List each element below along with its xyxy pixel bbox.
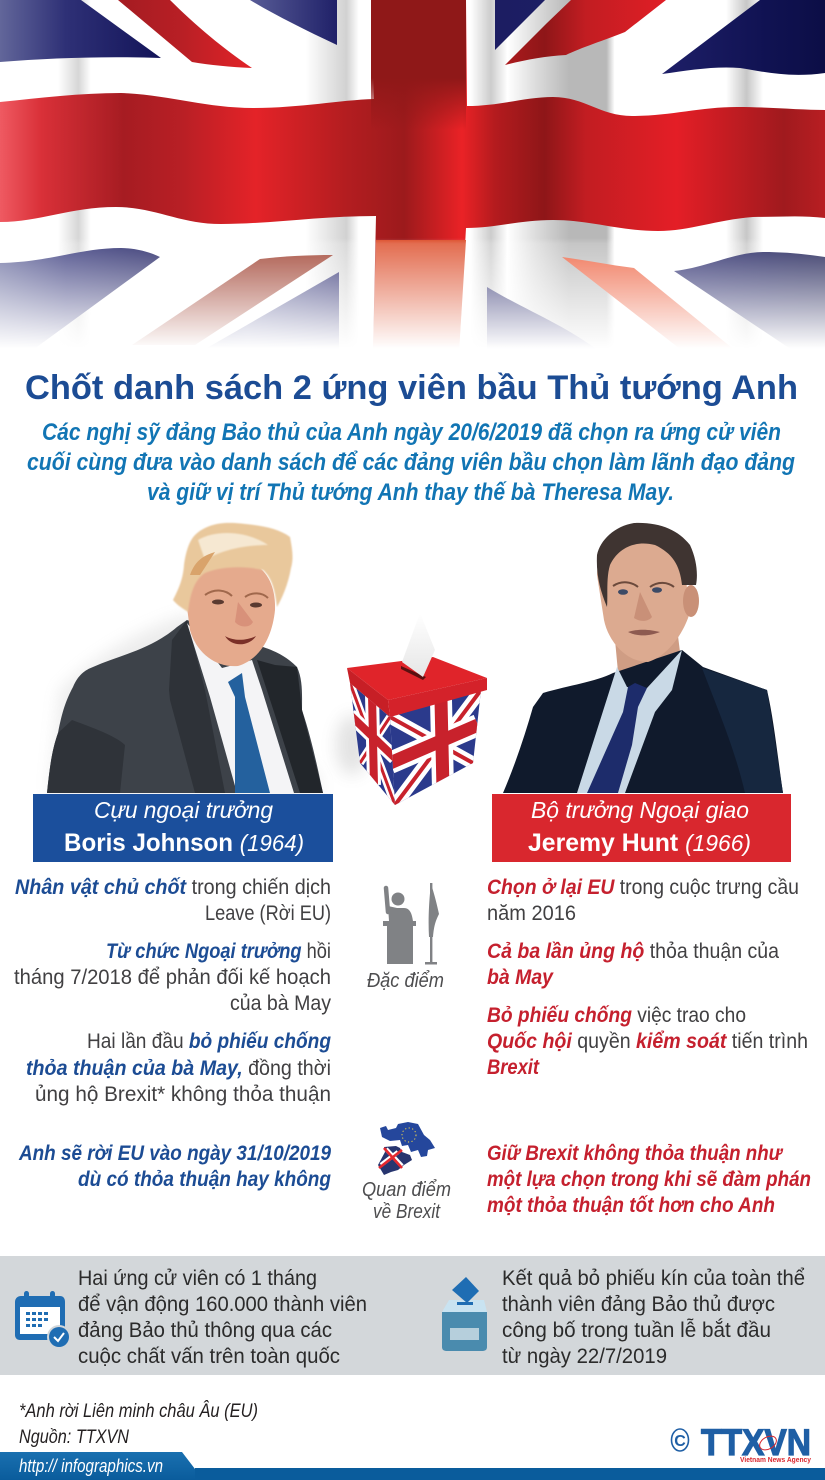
caption: Đặc điểm: Đặc điểm	[367, 970, 444, 992]
footnote and source	[19, 1400, 258, 1448]
Johnson Brexit view: dù có thỏa thuận hay không	[78, 1168, 331, 1191]
text: results: Kết quả bỏ phiếu kín của toàn thể	[502, 1267, 805, 1290]
Johnson Brexit view	[18, 1142, 331, 1191]
Hunt characteristics: Chọn ở lại EU trong cuộc trưng cầu	[487, 876, 799, 899]
Hunt characteristics	[487, 876, 808, 1079]
ballot box	[332, 634, 487, 805]
text: campaign month	[78, 1267, 367, 1368]
portrait: Jeremy Hunt	[503, 523, 783, 793]
Hunt characteristics: bà May	[487, 966, 554, 989]
text: results: thành viên đảng Bảo thủ được	[502, 1293, 775, 1316]
footer bar with URL tab: http:// infographics.vn	[19, 1456, 163, 1476]
text: campaign month: để vận động 160.000 thành viên	[78, 1293, 367, 1316]
Johnson characteristics: thỏa thuận của bà May, đồng thời	[26, 1057, 331, 1080]
text: campaign month: cuộc chất vấn trên toàn quốc	[78, 1345, 340, 1368]
Johnson characteristics: Từ chức Ngoại trưởng hồi	[106, 940, 331, 963]
Hunt characteristics: Bỏ phiếu chống việc trao cho	[487, 1004, 746, 1027]
icon: speaker at lectern with flag	[383, 883, 439, 964]
Johnson characteristics: Leave (Rời EU)	[205, 902, 331, 925]
label: Boris Johnson: Boris Johnson (1964)	[64, 829, 304, 857]
intro text	[27, 419, 795, 506]
Hunt Brexit view	[487, 1142, 811, 1217]
label: Jeremy Hunt	[492, 794, 791, 862]
text: results: từ ngày 22/7/2019	[502, 1345, 667, 1368]
text: campaign month: đảng Bảo thủ thông qua các	[78, 1319, 332, 1342]
icon: EU and UK puzzle pieces	[378, 1122, 435, 1175]
Johnson characteristics: Hai lần đầu bỏ phiếu chống	[87, 1030, 331, 1053]
Johnson characteristics: của bà May	[230, 992, 331, 1015]
label: Boris Johnson	[33, 794, 333, 862]
footer bar with URL tab	[0, 1452, 825, 1480]
Johnson Brexit view: Anh sẽ rời EU vào ngày 31/10/2019	[18, 1142, 331, 1165]
Hunt characteristics: Cả ba lần ủng hộ thỏa thuận của	[487, 940, 779, 963]
label: Boris Johnson: Cựu ngoại trưởng	[94, 797, 273, 823]
logo: TTXVN: TTXVN	[701, 1422, 811, 1463]
Hunt characteristics: năm 2016	[487, 902, 576, 925]
Hunt Brexit view: Giữ Brexit không thỏa thuận như	[487, 1142, 784, 1165]
text: campaign month: Hai ứng cử viên có 1 tháng	[78, 1267, 317, 1290]
icon: ballot box	[442, 1277, 487, 1351]
banner: waving Union Jack flag	[0, 0, 825, 352]
label: Jeremy Hunt: Jeremy Hunt (1966)	[528, 829, 751, 857]
logo: TTXVN: Vietnam News Agency	[740, 1455, 812, 1464]
footnote and source: *Anh rời Liên minh châu Âu (EU)	[19, 1400, 258, 1422]
label: Jeremy Hunt: Bộ trưởng Ngoại giao	[531, 797, 749, 823]
Johnson characteristics: ủng hộ Brexit* không thỏa thuận	[35, 1083, 331, 1106]
Hunt characteristics: Quốc hội quyền kiểm soát tiến trình	[487, 1030, 808, 1053]
portrait: Boris Johnson	[47, 523, 323, 793]
Hunt Brexit view: một thỏa thuận tốt hơn cho Anh	[487, 1194, 775, 1217]
Johnson characteristics: Nhân vật chủ chốt trong chiến dịch	[15, 876, 331, 899]
footnote and source: Nguồn: TTXVN	[19, 1427, 129, 1448]
title: Chốt danh sách 2 ứng viên bầu Thủ tướng Anh	[25, 369, 798, 407]
Hunt characteristics: Brexit	[487, 1056, 540, 1079]
caption: Quan điểm về Brexit: Quan điểm	[362, 1179, 451, 1201]
intro text: và giữ vị trí Thủ tướng Anh thay thế bà Theresa May.	[147, 479, 674, 506]
text: results: công bố trong tuần lễ bắt đầu	[502, 1319, 771, 1342]
grey info band	[0, 1256, 825, 1375]
caption: Quan điểm về Brexit	[362, 1179, 451, 1223]
text: results	[502, 1267, 805, 1368]
Johnson characteristics: tháng 7/2018 để phản đối kế hoạch	[14, 966, 331, 989]
Johnson characteristics	[14, 876, 331, 1106]
caption: Quan điểm về Brexit: về Brexit	[373, 1201, 441, 1223]
icon: calendar with check	[15, 1291, 71, 1349]
logo: TTXVN: C	[674, 1433, 686, 1450]
